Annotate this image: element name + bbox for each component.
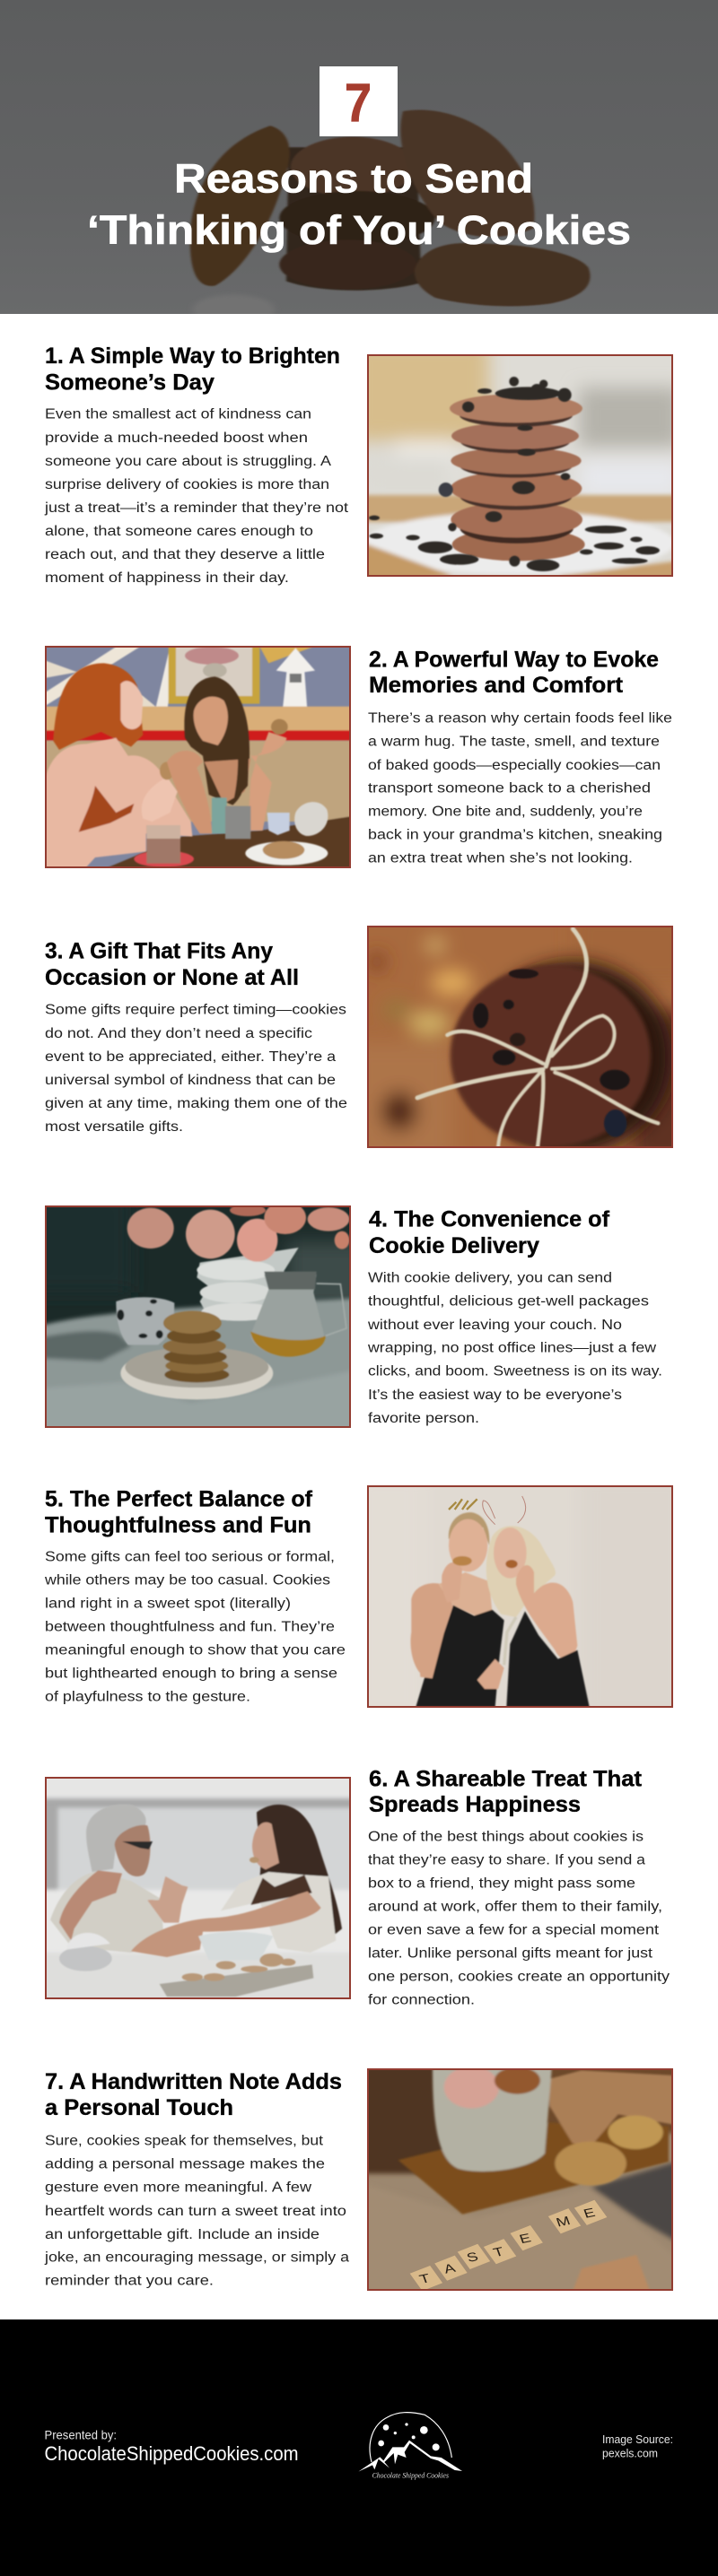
letter tiles: E	[582, 2206, 597, 2221]
body text 5: but lighthearted enough to bring a sense	[45, 1667, 337, 1681]
body text 3: do not. And they don’t need a specific	[45, 1026, 312, 1041]
letter tiles: M	[554, 2214, 573, 2230]
body text 1: someone you care about is struggling. A	[45, 454, 332, 469]
body text 5: Some gifts can feel too serious or formal,	[45, 1550, 335, 1564]
body text 1: surprise delivery of cookies is more than	[45, 477, 329, 492]
body text 4: With cookie delivery, you can send	[368, 1270, 612, 1286]
photo: two women laughing at a cafe table	[41, 642, 355, 874]
body text 1: just a treat—it’s a reminder that they’re not	[44, 500, 349, 516]
heading 3: Occasion or None at All	[45, 965, 299, 990]
body text 3: Some gifts require perfect timing—cookies	[45, 1003, 346, 1017]
body text 4: thoughtful, delicious get-well packages	[368, 1293, 649, 1310]
body text 2: an extra treat when she’s not looking.	[368, 850, 633, 866]
body text 4: favorite person.	[368, 1411, 479, 1426]
body text 5: of playfulness to the gesture.	[45, 1690, 250, 1704]
body text 2: a warm hug. The taste, smell, and texture	[368, 734, 660, 750]
body text 5	[44, 1550, 346, 1704]
body text 3: event to be appreciated, either. They’re a	[45, 1049, 336, 1065]
body text 7: Sure, cookies speak for themselves, but	[45, 2133, 324, 2149]
body text 4: without ever leaving your couch. No	[367, 1318, 622, 1333]
body text 7: joke, an encouraging message, or simply a	[44, 2250, 349, 2266]
heading 4	[369, 1207, 610, 1258]
presented by credit: ChocolateShippedCookies.com	[45, 2442, 298, 2465]
number badge	[320, 66, 398, 136]
hero banner	[0, 0, 718, 325]
body text 1	[44, 407, 349, 586]
heading 6	[369, 1767, 643, 1817]
number badge: 7	[345, 73, 372, 133]
section 3	[45, 911, 689, 1162]
body text 7: gesture even more meaningful. A few	[45, 2180, 312, 2196]
body text 1: provide a much-needed boost when	[45, 431, 308, 446]
body text 7: an unforgettable gift. Include an inside	[45, 2227, 320, 2242]
body text 3: universal symbol of kindness that can be	[45, 1073, 336, 1088]
section 6	[35, 1767, 670, 2008]
letter tiles	[410, 2200, 607, 2291]
letter tiles: T	[417, 2271, 433, 2286]
image source credit: pexels.com	[602, 2447, 658, 2459]
body text 4	[367, 1270, 662, 1426]
photo: stack of chocolate chip cookies	[352, 340, 680, 583]
heading 5: Thoughtfulness and Fun	[45, 1512, 311, 1537]
heading 2: Memories and Comfort	[369, 673, 624, 698]
body text 7	[44, 2133, 349, 2289]
heading 4: 4. The Convenience of	[369, 1207, 610, 1232]
body text 6: that they’re easy to share. If you send a	[368, 1853, 645, 1867]
body text 2: There’s a reason why certain foods feel like	[368, 710, 672, 727]
body text 2: of baked goods—especially cookies—can	[368, 758, 661, 773]
body text 3: most versatile gifts.	[45, 1119, 183, 1135]
body text 4: wrapping, no post office lines—just a few	[367, 1340, 657, 1356]
footer	[0, 2319, 718, 2576]
body text 7: reminder that you care.	[45, 2273, 214, 2289]
heading 7: 7. A Handwritten Note Adds	[45, 2069, 342, 2094]
letter tiles: E	[518, 2231, 533, 2246]
body text 2	[368, 710, 672, 866]
section 2	[41, 642, 672, 874]
body text 6: or even save a few for a special moment	[368, 1923, 660, 1937]
heading 1: 1. A Simple Way to Brighten	[45, 344, 340, 369]
body text 5: land right in a sweet spot (literally)	[45, 1597, 291, 1611]
letter tiles: A	[442, 2261, 458, 2276]
heading 5	[45, 1487, 313, 1537]
photo: mug, cookies and TASTE ME letter tiles	[357, 2058, 687, 2299]
title: Reasons to Send	[174, 156, 533, 201]
body text 4: It’s the easiest way to be everyone’s	[368, 1388, 622, 1403]
body text 6: for connection.	[368, 1993, 475, 2007]
photo: cookie tied with twine	[352, 911, 689, 1162]
body text 4: clicks, and boom. Sweetness is on its way.	[368, 1363, 662, 1379]
heading 5: 5. The Perfect Balance of	[45, 1487, 313, 1512]
body text 6	[368, 1830, 670, 2007]
body text 6: box to a friend, they might pass some	[368, 1876, 635, 1891]
title	[87, 156, 631, 253]
image source credit: Image Source:	[602, 2432, 673, 2446]
section 5	[44, 1471, 689, 1722]
body text 2: memory. One bite and, suddenly, you’re	[368, 804, 643, 820]
body text 6: One of the best things about cookies is	[368, 1830, 644, 1844]
heading 7: a Personal Touch	[45, 2095, 233, 2120]
heading 3: 3. A Gift That Fits Any	[45, 938, 273, 963]
body text 1: alone, that someone cares enough to	[45, 524, 313, 539]
logo: Chocolate Shipped Cookies: Chocolate Shipped Cookies	[372, 2472, 449, 2480]
photo: two women eating cookies	[352, 1471, 689, 1722]
heading 6: Spreads Happiness	[369, 1792, 581, 1817]
body text 5: while others may be too casual. Cookies	[44, 1573, 330, 1588]
body text 5: between thoughtfulness and fun. They’re	[45, 1620, 335, 1634]
hero background photo of chocolate cookies	[0, 0, 718, 314]
heading 3	[45, 938, 299, 990]
title: ‘Thinking of You’ Cookies	[87, 207, 631, 253]
presented by credit: Presented by:	[45, 2427, 117, 2441]
heading 2: 2. A Powerful Way to Evoke	[369, 648, 659, 673]
brunette	[184, 676, 250, 805]
body text 3: given at any time, making them one of the	[45, 1096, 347, 1111]
letter tiles: S	[465, 2250, 480, 2265]
body text 7: adding a personal message makes the	[45, 2156, 325, 2172]
body text 7: heartfelt words can turn a sweet treat into	[45, 2204, 346, 2219]
logo: Chocolate Shipped Cookies	[359, 2412, 462, 2480]
body text 1: moment of happiness in their day.	[45, 570, 289, 586]
photo: grandmother and young woman baking	[35, 1767, 362, 2008]
body text 1: Even the smallest act of kindness can	[45, 407, 311, 422]
body text 5: meaningful enough to show that you care	[45, 1643, 346, 1658]
heading 4: Cookie Delivery	[369, 1233, 539, 1258]
image source credit	[602, 2432, 673, 2459]
heading 7	[45, 2069, 342, 2120]
heading 1	[45, 344, 340, 395]
body text 2: transport someone back to a cherished	[368, 780, 651, 796]
section 1	[44, 340, 680, 586]
body text 6: later. Unlike personal gifts meant for just	[368, 1946, 653, 1961]
body text 6: around at work, offer them to their family,	[368, 1900, 662, 1914]
body text 2: back in your grandma’s kitchen, sneaking	[368, 827, 662, 843]
photo: cookies on a plate with roses and glass teapot	[30, 1191, 364, 1434]
body text 3	[45, 1003, 347, 1135]
presented by credit	[45, 2427, 298, 2465]
heading 2	[369, 648, 659, 698]
heading 6: 6. A Shareable Treat That	[369, 1767, 643, 1792]
body text 6: one person, cookies create an opportunity	[368, 1970, 670, 1984]
section 4	[30, 1191, 662, 1434]
heading 1: Someone’s Day	[45, 370, 215, 395]
body text 1: reach out, and that they deserve a little	[45, 547, 325, 562]
section 7	[44, 2058, 687, 2299]
redhead	[53, 663, 143, 750]
letter tiles: T	[491, 2245, 506, 2259]
